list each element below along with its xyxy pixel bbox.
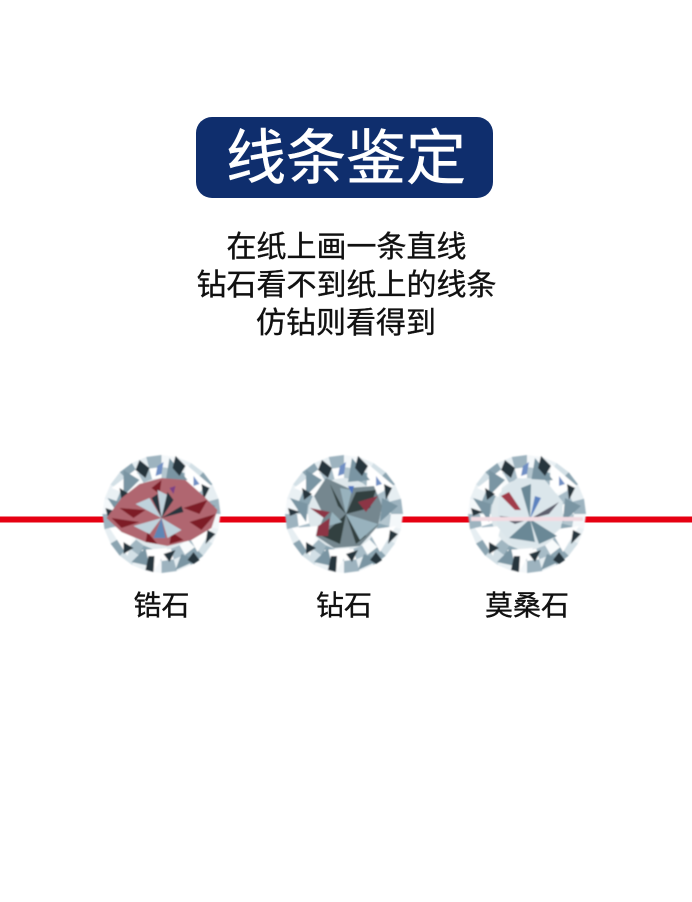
description text: 仿钻则看得到 [256,307,436,340]
description text: 在纸上画一条直线 [226,231,466,264]
labels: 锆石 [133,590,190,621]
labels [133,590,569,621]
labels: 莫桑石 [485,590,569,621]
diamond: zirconia [102,455,220,573]
description text [196,231,496,340]
red line [0,516,692,522]
labels: 钻石 [316,590,372,621]
title: 线条鉴定 [226,125,466,192]
diamond: real diamond [285,455,403,573]
title banner [196,117,493,198]
diamond: moissanite [468,455,586,573]
description text: 钻石看不到纸上的线条 [196,269,496,302]
